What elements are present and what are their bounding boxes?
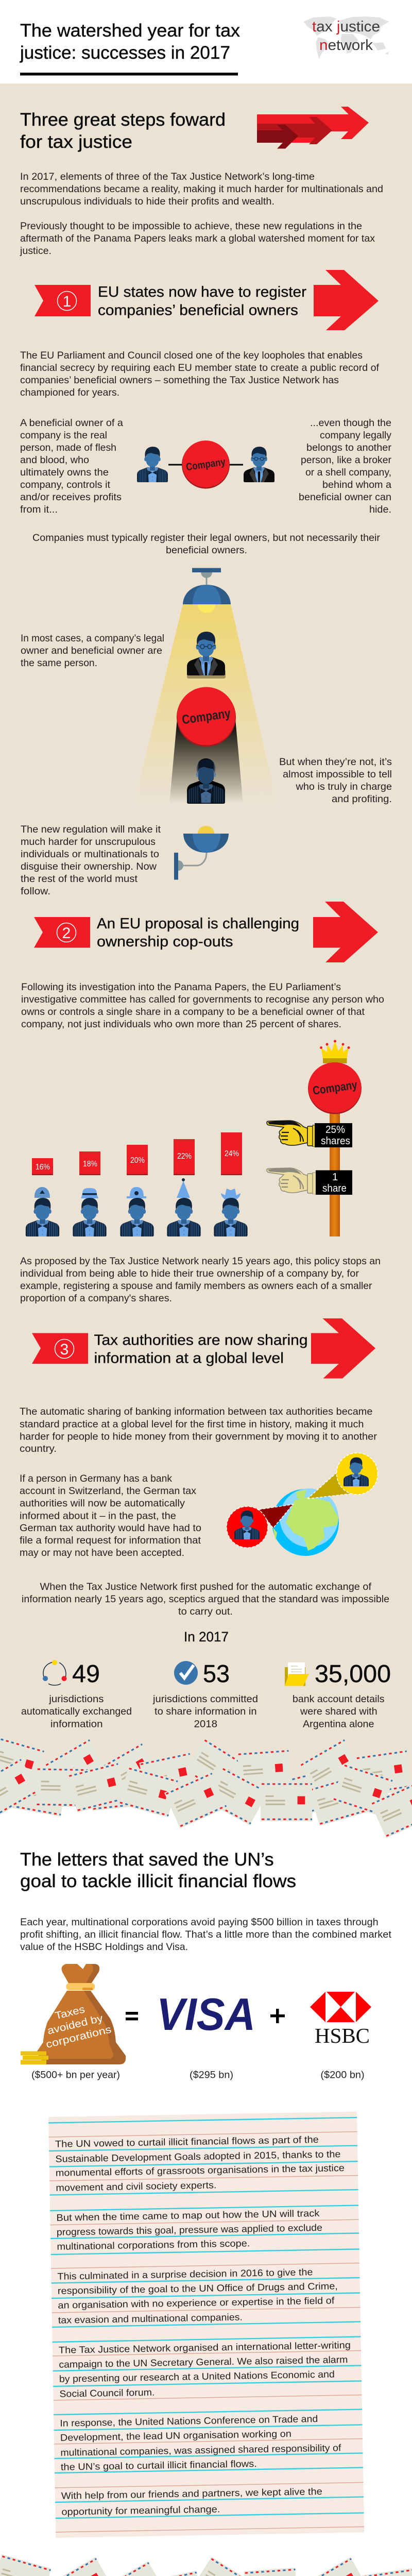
stat: 49 jurisdictions: information: [50, 1719, 103, 1730]
section 3: tax authorities sharing: [20, 1318, 391, 1730]
man with police hat: [120, 1187, 154, 1236]
man with bowler hat: [73, 1188, 107, 1236]
bar 20%: 20%: [130, 1156, 145, 1165]
paragraph: corporations avoid: [20, 1917, 392, 1953]
paragraph: automatic sharing: The automatic sharing of banking information between tax authorities became: [20, 1406, 373, 1417]
logo: hsbc: HSBC: [315, 2024, 370, 2047]
text: Germany example: If a person in Germany has a bank: [20, 1473, 172, 1484]
text: legal owner: belongs to another: [306, 442, 392, 453]
text: legal owner: person, like a broker: [301, 454, 392, 466]
envelopes band bottom: [0, 2554, 412, 2576]
paragraph: policy stops: individual from being able to hide their true ownership of a company by, for: [20, 1268, 359, 1279]
heading: letters: The letters that saved the UN’s: [20, 1850, 274, 1870]
heading: letters: goal to tackle illicit financial flows: [20, 1871, 296, 1891]
heading: three great steps: Three great steps foward: [20, 110, 226, 130]
bag label: corporations: [45, 2024, 113, 2050]
letter paragraph 5: [60, 2413, 342, 2472]
icon: wall lamp: [174, 826, 229, 880]
paragraph: EU proposal: [21, 981, 384, 1030]
paragraph: automatic sharing: country.: [20, 1443, 57, 1454]
banner 1: 1: [63, 293, 71, 310]
banner 3: information at a global level: [94, 1350, 284, 1367]
banner 2: An EU proposal is challenging: [97, 916, 299, 932]
bag label: avoided by: [46, 2012, 104, 2037]
letter paragraph 6: [61, 2486, 322, 2517]
icon: money bag: [21, 1964, 126, 2064]
section: letters: [20, 1850, 392, 2081]
bar 24%: [221, 1132, 242, 1175]
text: beneficial owner definition: from it...: [20, 504, 58, 515]
paragraph: policy stops: As proposed by the Tax Justice Network nearly 15 years ago, this policy stops an: [20, 1256, 381, 1267]
captions: values: ($295 bn): [190, 2070, 233, 2081]
captions: values: [31, 2070, 365, 2081]
icon: folder: [285, 1662, 309, 1686]
letter paragraph 5: In response, the United Nations Conference on Trade and: [60, 2413, 318, 2429]
illustration: globe with exchanging people: [227, 1453, 378, 1556]
paragraph: policy stops: proportion of a company's shares.: [20, 1293, 172, 1304]
company circle: [177, 687, 236, 747]
stat: 53 jurisdictions: 2018: [194, 1719, 217, 1730]
heading: in 2017: In 2017: [184, 1629, 229, 1645]
logo: tax justice network: [304, 16, 389, 59]
intro text: Previously thought to be impossible to achieve, these new regulations in the: [20, 221, 362, 232]
text: same person: owner and beneficial owner are: [21, 645, 162, 656]
text: legal owner: behind whom a: [322, 479, 391, 490]
text: companies must register: [32, 532, 381, 556]
company circle: Company: [312, 1078, 358, 1097]
man: beneficial owner in shadow: [187, 758, 225, 804]
paragraph: EU parliament: The EU Parliament and Council closed one of the key loopholes that enables: [20, 350, 363, 361]
bar 18%: [79, 1151, 100, 1175]
letter paragraph 4: Social Council forum.: [59, 2386, 155, 2399]
paragraph: automatic sharing: [20, 1406, 377, 1454]
intro text: [20, 171, 383, 257]
beige background: upper: [0, 83, 412, 1793]
paragraph: EU proposal: investigative committee has called for governments to recognise any person who: [21, 994, 384, 1005]
illustration: crowned company on pole: [267, 1040, 362, 1236]
bar 16%: [32, 1158, 53, 1175]
banner 3: 3: [60, 1341, 68, 1358]
letter paragraph 1: monumental efforts of grassroots organisations in the tax justice: [56, 2162, 345, 2178]
text: new regulation: much harder for unscrupulous: [21, 836, 156, 848]
intro text: aftermath of the Panama Papers leaks mark a global watershed moment for tax: [20, 233, 375, 244]
paragraph: corporations avoid: profit shifting, an illicit financial flow. That’s a little more than the combined market: [20, 1929, 392, 1940]
letter paragraph 4: The Tax Justice Network organised an international letter-writing: [59, 2340, 351, 2355]
letter paragraph 2: [56, 2208, 322, 2252]
stat: 53 jurisdictions: 53: [203, 1660, 230, 1688]
text: sceptics: to carry out.: [178, 1606, 233, 1617]
icon: triple arrow: [257, 107, 369, 148]
paragraph: EU parliament: financial secrecy by requiring each EU member state to create a public record of: [20, 362, 380, 374]
banner 1: EU states now have to register: [98, 284, 306, 300]
stat: 53 jurisdictions: [152, 1660, 258, 1730]
text: impossible to tell: almost impossible to tell: [283, 769, 392, 780]
text: companies must register: beneficial owners.: [166, 545, 247, 556]
letter paragraph 3: This culminated in a surprise decision in 2016 to give the: [57, 2266, 313, 2282]
section 1: EU registers: [20, 270, 392, 897]
text: beneficial owner definition: person, made of flesh: [20, 442, 116, 453]
pole: [330, 1110, 340, 1236]
text: legal owner: or a shell company,: [305, 467, 391, 478]
letter paragraph 6: opportunity for meaningful change.: [61, 2503, 220, 2517]
crown: [320, 1040, 350, 1063]
intro text: unscrupulous individuals to hide their profits and wealth.: [20, 196, 274, 207]
text: same person: In most cases, a company’s legal: [21, 633, 164, 644]
stat: 53 jurisdictions: jurisdictions committed: [152, 1693, 258, 1705]
globe: [272, 1488, 339, 1556]
text: new regulation: the rest of the world must: [21, 873, 138, 885]
text: impossible to tell: [279, 756, 392, 805]
icon: ring of dots: [43, 1660, 67, 1685]
letter paragraph 4: [59, 2340, 351, 2399]
text: beneficial owner definition: A beneficial owner of a: [20, 417, 123, 429]
letter paragraph 5: the UN’s goal to curtail illicit financial flows.: [61, 2458, 257, 2472]
paragraph: EU parliament: companies’ beneficial owners – something the Tax Justice Network has: [20, 375, 339, 386]
equals sign: [126, 2012, 138, 2021]
text: beneficial owner definition: ultimately owns the: [20, 467, 109, 478]
text: beneficial owner definition: and blood, who: [20, 454, 89, 466]
text: impossible to tell: But when they’re not, it’s: [279, 756, 392, 768]
heading: three great steps: [20, 110, 226, 152]
title rule: [20, 73, 238, 75]
text: beneficial owner definition: and/or receives profits: [20, 492, 122, 503]
text: beneficial owner definition: company, controls it: [20, 479, 111, 490]
banner 2: [34, 902, 378, 962]
man with fedora: [214, 1189, 248, 1236]
stat: 35,000 accounts: Argentina alone: [303, 1719, 374, 1730]
bag label: Taxes: [54, 2004, 86, 2022]
text: new regulation: follow.: [21, 886, 50, 897]
logo: tax justice network: network: [319, 37, 373, 54]
title: The watershed year for tax: [20, 21, 241, 41]
paragraph: policy stops: [20, 1256, 381, 1304]
bar 20%: [127, 1145, 148, 1175]
header: [20, 16, 389, 75]
man: legal owner in light: [187, 632, 226, 679]
sign: 1 share: [316, 1171, 352, 1195]
text: Germany example: German tax authority would have had to: [20, 1522, 201, 1534]
intro text: recommendations became a reality, making it much harder for multinationals and: [20, 183, 383, 195]
sign: 1 share: 1: [332, 1172, 338, 1183]
man with party hat: [167, 1178, 201, 1236]
letter paragraph 3: an organisation with no experience or expertise in the field of: [58, 2295, 335, 2311]
paragraph: corporations avoid: value of the HSBC Holdings and Visa.: [20, 1941, 188, 1953]
text: same person: the same person.: [21, 657, 97, 669]
text: impossible to tell: and profiting.: [332, 793, 392, 805]
diagram: owner, company, legal owner: Company: [185, 456, 227, 473]
paragraph: policy stops: example, registering a spouse and family members as owners each of a smaller: [20, 1280, 372, 1292]
title: justice: successes in 2017: [20, 43, 230, 63]
letter paragraph 2: But when the time came to map out how the UN will track: [56, 2208, 320, 2223]
pointing hand: 1 share: [267, 1168, 317, 1194]
text: sceptics: [22, 1581, 389, 1617]
bag label: [39, 1999, 113, 2050]
heading: three great steps: for tax justice: [20, 132, 132, 152]
text: legal owner: company legally: [320, 430, 391, 441]
stat: 53 jurisdictions: to share information in: [154, 1706, 256, 1717]
letter paragraph 1: [55, 2133, 345, 2193]
text: Germany example: informed about it – in the past, the: [20, 1511, 176, 1522]
intro text: justice.: [20, 245, 52, 257]
paragraph: EU proposal: Following its investigation into the Panama Papers, the EU Parliament’s: [21, 981, 341, 993]
stat: 35,000 accounts: 35,000: [315, 1660, 391, 1688]
banner 3: [32, 1318, 375, 1379]
icon: check: [174, 1661, 198, 1685]
section 2: ownership cop-outs: [20, 902, 384, 1304]
letter paragraph 3: [57, 2266, 338, 2326]
letter paragraph 6: With help from our friends and partners, we kept alive the: [61, 2486, 322, 2501]
bubble: yellow person: [307, 1453, 378, 1499]
text: sceptics: information nearly 15 years ago, sceptics argued that the standard was impossible: [22, 1594, 389, 1605]
panel: lined letter: [48, 2112, 364, 2538]
stat: 35,000 accounts: [285, 1660, 391, 1730]
text: legal owner: hide.: [369, 504, 391, 515]
company circle: [308, 1062, 362, 1114]
text: Germany example: [20, 1473, 201, 1558]
heading: letters: [20, 1850, 296, 1891]
paragraph: automatic sharing: harder for people to hide money from their government by moving it to another: [20, 1431, 377, 1443]
bar 16%: 16%: [36, 1163, 50, 1172]
banner 1: [35, 270, 379, 330]
letter paragraph 4: campaign to the UN Secretary General. We also raised the alarm: [59, 2354, 348, 2370]
diagram: owner, company, legal owner: [137, 440, 274, 488]
sign: 25% shares: shares: [321, 1136, 350, 1147]
text: new regulation: individuals or multinationals to: [21, 849, 159, 860]
text: sceptics: When the Tax Justice Network first pushed for the automatic exchange of: [40, 1581, 372, 1592]
banner 3: Tax authorities are now sharing: [94, 1332, 308, 1349]
shadow beam: [169, 719, 243, 804]
letter paragraph 2: multinational corporations from this scope.: [57, 2238, 250, 2252]
text: impossible to tell: who is truly in charge: [295, 781, 392, 792]
stat: 35,000 accounts: were shared with: [300, 1706, 377, 1717]
stat: 49 jurisdictions: automatically exchanged: [21, 1706, 132, 1717]
letter paragraph 1: The UN vowed to curtail illicit financial flows as part of the: [55, 2134, 319, 2149]
text: new regulation: The new regulation will make it: [21, 824, 161, 835]
letter paragraph 5: Development, the lead UN organisation working on: [60, 2428, 291, 2443]
logo: hsbc: [310, 1992, 371, 2047]
envelopes band top: [0, 1736, 412, 1838]
banner 1: companies’ beneficial owners: [98, 302, 298, 318]
banner 2: 2: [62, 925, 71, 942]
letter paragraph 4: by presenting our research at a United Nations Economic and: [59, 2368, 335, 2384]
text: beneficial owner definition: [20, 417, 123, 515]
company circle: Company: [181, 706, 232, 727]
captions: values: ($500+ bn per year): [31, 2070, 120, 2081]
paragraph: corporations avoid: Each year, multinational corporations avoid paying $500 billion in taxes through: [20, 1917, 379, 1928]
ceiling lamp: [183, 568, 231, 613]
stat: 49 jurisdictions: jurisdictions: [48, 1693, 104, 1705]
title: [20, 21, 241, 63]
text: legal owner: beneficial owner can: [299, 492, 391, 503]
bar 22%: [174, 1139, 195, 1175]
banner 2: ownership cop-outs: [97, 934, 233, 950]
text: new regulation: [21, 824, 161, 897]
intro text: In 2017, elements of three of the Tax Justice Network’s long-time: [20, 171, 315, 182]
text: Germany example: file a formal request for information that: [20, 1535, 201, 1546]
letter paragraph 2: progress towards this goal, pressure was applied to exclude: [57, 2222, 322, 2238]
letter paragraph 3: responsibility of the goal to the UN Office of Drugs and Crime,: [58, 2280, 338, 2296]
logo: visa: VISA: [157, 1989, 255, 2040]
stat: 49 jurisdictions: 49: [72, 1660, 100, 1688]
plus sign: [270, 2009, 285, 2023]
bar 22%: 22%: [177, 1152, 192, 1161]
man with cap: [26, 1187, 59, 1236]
text: Germany example: account in Switzerland, the German tax: [20, 1485, 196, 1497]
light beam: [134, 604, 277, 804]
bar 18%: 18%: [83, 1160, 97, 1168]
paragraph: EU parliament: championed for years.: [20, 387, 119, 398]
bar 24%: 24%: [225, 1149, 239, 1158]
paragraph: EU proposal: company, not just individuals who own more than 25 percent of shares.: [21, 1019, 341, 1030]
chart: share bars with men: [26, 1132, 248, 1236]
logo: tax justice network: tax justice: [312, 19, 380, 35]
text: legal owner: ...even though the: [310, 417, 391, 429]
stat: 49 jurisdictions: [21, 1660, 132, 1730]
pointing hand: 25%: [267, 1121, 317, 1147]
letter paragraph 1: Sustainable Development Goals adopted in 2015, thanks to the: [55, 2148, 341, 2164]
paragraph: EU proposal: owns or controls a single share in a company to be a beneficial owner of that: [21, 1006, 365, 1018]
coins: [21, 2052, 48, 2064]
letter paragraph 3: tax evasion and multinational companies.: [58, 2311, 243, 2326]
illustration: spotlight on company: [134, 568, 277, 804]
bubble: red person: [227, 1504, 293, 1548]
sign: 25% shares: 25%: [325, 1124, 345, 1136]
sign: 25% shares: [315, 1123, 352, 1147]
text: same person: [21, 633, 164, 669]
section: three great steps: [20, 107, 383, 257]
sign: 1 share: share: [322, 1183, 347, 1194]
letter paragraph 1: movement and civil society experts.: [56, 2179, 217, 2193]
text: beneficial owner definition: company is the real: [20, 430, 107, 441]
stat: 35,000 accounts: bank account details: [293, 1693, 385, 1705]
text: companies must register: Companies must typically register their legal owners, but not necessarily their: [32, 532, 381, 544]
text: Germany example: may or may not have been accepted.: [20, 1547, 184, 1558]
paragraph: automatic sharing: standard practice at a global level for the first time in history, making it much: [20, 1419, 364, 1430]
text: new regulation: disguise their ownership. Now: [21, 861, 157, 872]
text: legal owner: [299, 417, 392, 515]
captions: values: ($200 bn): [320, 2070, 365, 2081]
letter paragraph 5: multinational companies, was assigned shared responsibility of: [60, 2442, 341, 2458]
text: Germany example: authorities will now be automatically: [20, 1498, 185, 1509]
paragraph: EU parliament: [20, 350, 380, 398]
